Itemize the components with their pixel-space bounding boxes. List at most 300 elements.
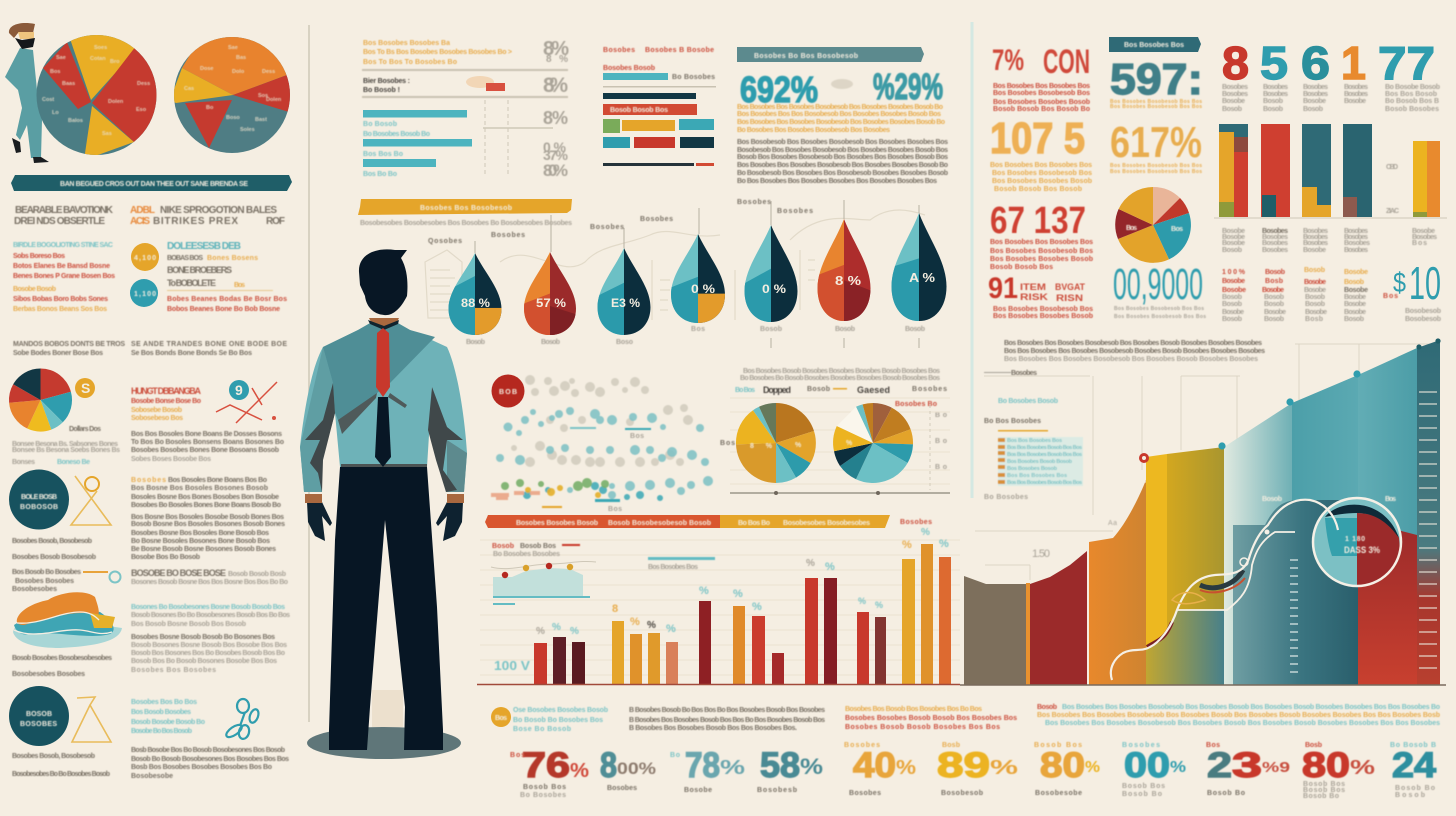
hands <box>307 502 463 541</box>
text block: percentage labels: Bo Bosobes <box>520 792 566 799</box>
bar chart: teal horizontal bars: Bo Bosobes Bosob Bo <box>363 131 430 138</box>
text block: percentage labels: Bosobes <box>849 790 881 797</box>
bar chart: teal horizontal bars: Bos Bos Bo <box>363 151 403 158</box>
text block: digit captions: Bosob <box>1263 106 1283 113</box>
big percentages: 3 <box>1232 746 1262 785</box>
text block: percentage labels: Bosob Bos <box>1303 781 1345 788</box>
text block: percentage labels: Bos <box>510 752 525 759</box>
pie chart: right: Dolo <box>232 69 245 75</box>
panel: teardrop charts <box>358 199 946 348</box>
big numbers: column two: Bos Bosobes Bosobesob Bos Bos <box>1110 99 1202 105</box>
text block: column captions: Bosobe <box>1262 287 1284 294</box>
big numbers and copy: column one: 91 <box>988 272 1018 305</box>
mini area chart: Bo Bosobes Bosobes <box>493 551 560 558</box>
icon: yellow badge: 4,100 <box>134 255 156 262</box>
bar chart: teal horizontal bars: 0% <box>543 139 567 155</box>
text block: column captions: Bosobe <box>1222 287 1246 294</box>
big percentages: %9 <box>1262 759 1290 776</box>
panel: twin pie charts <box>720 368 950 495</box>
text block: chart intro and legend: Bos Bosobes Bos Bosobes Bosobesob Bos Bosobes Bosob Bosobes Bosobes Bosobes <box>1004 340 1262 347</box>
text block: bottom copy <box>513 704 1440 733</box>
teardrop labels <box>428 199 925 346</box>
pie chart: right: Sae <box>228 45 238 51</box>
text block: column captions: Bos <box>1383 293 1398 300</box>
column value labels: % <box>552 622 561 633</box>
column value labels: % <box>699 585 709 597</box>
bar chart: stacked columns: ZIAC <box>1386 208 1399 215</box>
text block: captions two: Bosobes Bosob, Bosobesob <box>12 753 95 760</box>
text block: copy: Bo Bosobesob Bos Bosobes Bos Bosobesob Bosobes Bosobes Bosob <box>737 170 948 177</box>
shadow <box>307 727 461 759</box>
column value labels: % <box>921 527 930 538</box>
text block: column captions: Bosob <box>1222 294 1242 301</box>
icon: teal number badge with arrow: 9 <box>235 382 243 398</box>
text block: percentage labels: Bosob Bo <box>1395 785 1435 792</box>
teardrop labels: Bosobes <box>640 216 673 223</box>
column value labels: % <box>902 539 912 551</box>
text block: digit captions: Bo Bosob Bos B <box>1385 98 1439 105</box>
text block: long copy: Bosob Bosne Bos Bosoles Bosones Bosob Bones <box>131 521 285 528</box>
banner: section heading: BAN BEGUED CROS OUT DAN THEE OUT SANE BRENDA SE <box>60 181 248 188</box>
text block: bottom copy: Bos Bosobes Bos Bosobes Bosobesob Bos Bosobes Bosob Bos Bosobes Bosob Bosobes Bosobes Bos Bos Bosobes Bo <box>1062 704 1440 711</box>
text block: captions one <box>12 538 96 593</box>
text block: intro columns: ROF <box>266 216 285 227</box>
big percentages: % <box>990 757 1018 779</box>
text block: digit captions: Bosobes <box>1303 84 1328 91</box>
pie chart: left: Cotan <box>90 56 106 62</box>
text block: captions one: Bosobesobes <box>12 586 57 593</box>
text block: copy: Bos Bosobes Bos Bosobes Bosobesob Bos Bosobes Bosobes Bosob Bo <box>737 162 948 169</box>
shirt <box>300 322 467 492</box>
text block: column captions: Bosobe <box>1344 294 1366 301</box>
text block: percentage labels: Bosobes <box>844 742 880 749</box>
icon: yellow triangle two <box>72 697 111 742</box>
text block: column captions: Bosobe <box>1222 228 1245 235</box>
text block: captions one: Bosobes Bosob, Bosobesob <box>12 538 92 545</box>
text block: digit captions: Bosobe <box>1344 98 1366 105</box>
text block: pie header: Bo Bos <box>735 387 755 394</box>
banner: orange heading: Bosob Bosobesobesob Bosob <box>608 520 711 527</box>
text block: column captions: Bosobe <box>1305 309 1327 316</box>
banner: orange heading: Bosobesobes Bosobesobes <box>783 520 870 527</box>
text block: digit captions: Bosobes <box>1263 91 1288 98</box>
text block: intro columns: SE ANDE TRANDES BONE ONE BODE BOE <box>131 341 287 348</box>
text block: long copy: Bosob Bosobe Bosob Bo <box>131 719 205 726</box>
panel: right column statistics <box>988 37 1447 323</box>
teardrop 5 <box>744 225 798 322</box>
teardrop labels: Bosobes <box>590 224 624 231</box>
column value labels: % <box>647 620 656 631</box>
text block: long copy: Sobosebeso Bos <box>131 415 183 422</box>
text block: intro columns: Se Bos Bonds Bone Bonds Se Bo Bos <box>131 350 252 357</box>
pie chart: left: Balos <box>68 118 83 124</box>
text block: column captions: Bosob <box>1222 316 1242 323</box>
text block: intro columns: DREI NDS OBSERTLE <box>14 216 105 227</box>
big percentages: % <box>1170 759 1186 776</box>
pie chart: left: Eso <box>136 107 147 113</box>
text block: pie header: Bo Bosobes Bo Bosob Bosobes Bosobes Bosobes Bosob Bosobes Bos <box>740 375 940 382</box>
banner: orange heading: Bosobes Bosobes Bosob <box>516 520 598 527</box>
text block: long copy: Bosb Bosobe Bos Bo Bosob Bosobesones Bos Bosob <box>131 747 285 754</box>
text block: column captions: Bosobes <box>1344 228 1368 235</box>
big percentages: % <box>800 754 823 779</box>
text block: percentage labels: Bosobesob <box>941 790 983 797</box>
text block: yellow header: Bos To Bos To Bosobes Bo <box>363 59 457 66</box>
banner: yellow heading <box>358 199 572 215</box>
big numbers and copy: column one: Bos Bosobes Bosobesob Bos <box>993 306 1093 313</box>
column value labels: % <box>875 600 883 610</box>
banner: orange heading: Bo Bos Bo <box>738 520 770 527</box>
pie chart: middle right <box>833 403 913 483</box>
panel: grouped column chart <box>477 515 960 684</box>
text block: chart intro and legend: Bos Bos Bosobes Bos <box>1007 438 1062 444</box>
text block: long copy: Bosobe Bos Bo Bosob <box>131 554 200 561</box>
text block: captions one: Bosobes Bosobes <box>15 578 74 585</box>
text block: digit captions: Bosobes <box>1222 84 1248 91</box>
text block: column captions: Bosobe <box>1344 301 1366 308</box>
text block: bottom copy: Ose Bosobes Bosobes Bosob <box>513 707 608 714</box>
panel: top right copy <box>737 47 948 185</box>
text block: long copy: Be Bosne Bosob Bosne Bosones Bosob Bones <box>131 546 276 553</box>
pie chart: right: Boso <box>226 115 240 121</box>
mini area chart: Bos Bosobes Bos <box>648 564 698 571</box>
big numbers and copy: column one: Bos Bosobes Bosobes Bosob <box>993 313 1093 320</box>
text block: long copy: Bosob Bosones Bosne Bosob Bos Bosobe Bos Bos <box>131 642 287 649</box>
text block: column captions: Bosob <box>1222 247 1242 254</box>
big numbers and copy: column one: RISN <box>1056 293 1083 303</box>
text block: digit captions: Bosob <box>1303 106 1323 113</box>
text block: badge copy: DOLEESESB DEB <box>167 241 241 252</box>
text block: badge copy: Bones Bosens <box>207 255 258 262</box>
text block: column captions: Bosobe <box>1344 287 1368 294</box>
text block: long copy: Bosobe Bo Bos Bosob <box>131 728 192 735</box>
text block: pie header: Bo <box>935 438 947 445</box>
panel: dot cluster map <box>491 374 713 513</box>
text block: chart intro and legend: Bo Bosobes <box>984 494 1028 501</box>
big numbers: column two: Bos Bosobes Bosobesob Bos Bos <box>1110 104 1202 110</box>
big percentages: 89 <box>937 746 990 785</box>
column value labels: % <box>858 596 866 606</box>
icon: red badge <box>492 374 524 408</box>
icon: dark circle badge one <box>9 470 69 530</box>
panel: bottom statistics row <box>491 704 1440 800</box>
big number: dollar value: $ <box>1393 267 1406 298</box>
big percentages: 00% <box>617 759 656 778</box>
icon: red badge: BOB <box>499 389 517 396</box>
column value labels: 8 <box>612 603 618 615</box>
text block: percentage labels: Bosobes <box>1122 742 1160 749</box>
text block: chart intro and legend: Bos Bosobes Bosob Bosob <box>1007 459 1073 465</box>
text block: percentage labels: Bosob Bos <box>1122 783 1165 790</box>
bar chart: teal horizontal bars: 37% <box>543 147 569 163</box>
text block: column captions: Bosb <box>1305 316 1323 323</box>
text block: copy <box>737 104 948 185</box>
text block: digit captions: Bo Bosobe Bosob <box>1385 84 1440 91</box>
text block: column captions: Bosob <box>1305 301 1325 308</box>
banner: teal tag: Bos Bosobes Bos <box>1124 42 1184 49</box>
text block: column captions: Bos <box>1412 240 1427 247</box>
text block: column captions: Bosob <box>1344 279 1364 286</box>
text block: wave captions: Bosobesobes Bosobes <box>12 671 85 678</box>
text block: column captions: Bosobe <box>1344 269 1368 276</box>
column value labels: % <box>733 588 743 600</box>
big numbers and copy: column one: Bosob Bosob Bos <box>990 264 1053 271</box>
text block: pie header: Gaesed <box>857 385 890 395</box>
teardrop labels: Qosobes <box>428 238 462 245</box>
text block: column captions: Bosobe <box>1304 287 1326 294</box>
teardrop labels: Boso <box>616 339 633 346</box>
text block: chart intro and legend: Bos Bos Bosobes Bosob Bos Bos <box>1007 480 1082 486</box>
teardrop 7 <box>892 213 946 321</box>
text block: column captions: Bosobes <box>1262 247 1288 254</box>
text block: percentage labels: Bosobesobe <box>1035 790 1082 797</box>
big numbers: column two: Bos Bosobes Bosobesob Bos Bos <box>1114 314 1206 320</box>
bar chart: teal horizontal bars: Bo Bosob <box>363 121 397 128</box>
big numbers: column two: Bos Bosobes Bosobesob Bos Bos <box>1110 163 1202 169</box>
text block: percentage labels: Bosobe <box>684 787 712 794</box>
text block: chart intro and legend: Bos Bos Bosobes Bosob Bos Bos <box>1007 445 1082 451</box>
text block: column captions: Bosobes <box>1344 234 1368 241</box>
text block: percentage labels: Bosob Bos <box>1303 787 1345 794</box>
text block: bottom copy: Bosobes Bosobes Bosob Bosob Bos Bosobes Bos <box>845 715 1017 722</box>
text block: badge copy: Bobos Beanes Bone Bo Bob Bosne <box>167 306 280 313</box>
teardrop 2 <box>524 252 576 335</box>
chart small labels: Bosob <box>1262 496 1282 503</box>
text block: copy: Bosobesob Bos Bosobes Bosobesob Bos Bosobes Bosobes Bosob Bos <box>737 147 948 154</box>
text block: intro columns: Sobs Boreso Bos <box>13 253 65 260</box>
pie chart: left: Sas <box>102 131 112 137</box>
text block: column captions: Bosob <box>1305 294 1325 301</box>
text block: long copy: Bosobes Bosne Bos Bosoles Bone Bosob Bos <box>131 530 269 537</box>
big numbers: teal percentages: %29% <box>873 66 943 107</box>
text block: bottom copy: B Bosobes Bosob Bo Bos Bos Bo Bos Bosobes Bosob Bos Bosobes <box>629 707 825 714</box>
banner: slate heading: Bosobes Bo Bos Bosobesob <box>754 53 858 60</box>
pie chart: left: Baas <box>62 81 75 87</box>
text block: column captions: Bosobes <box>1262 228 1288 235</box>
dot clusters: Bos <box>630 433 644 440</box>
panel: middle stacked bars: Bo Bosobes <box>672 74 715 81</box>
pie chart: right: Dose <box>200 66 213 72</box>
pie chart: right: Bo <box>206 105 214 111</box>
text block: copy: Bosob Bos Bosobes Bosobesob Bos Bosobes Bos Bosobes Bosob Bos <box>737 154 948 161</box>
big percentages <box>522 746 1437 785</box>
text block: column captions: Bosob <box>1304 267 1325 274</box>
text block: chart intro and legend: Bo Bosobes Bosob <box>998 398 1058 405</box>
text block: column captions <box>1222 228 1441 323</box>
text block: percentage labels: Bosob Bo <box>1303 793 1339 800</box>
text block: yellow header: 8% <box>546 54 568 65</box>
icon: yellow coin <box>75 378 95 398</box>
text block: percentage labels: Bosobesb <box>757 787 797 794</box>
text block: percentage labels: Bosob Bo <box>1122 791 1162 798</box>
text block: badge copy: BOBAS BOS <box>167 255 203 262</box>
bar chart: teal horizontal bars: 8% <box>543 108 568 128</box>
text block: column captions: Bosobe <box>1222 278 1245 285</box>
big numbers: column two: 597: <box>1110 55 1203 104</box>
big digits: top right <box>1222 37 1435 89</box>
big digits: top right: 5 <box>1260 37 1288 89</box>
panel: middle stacked bars <box>603 47 716 166</box>
big percentages: 76 <box>522 746 570 785</box>
text block: long copy: To Bos Bo Bosoles Bonsens Boans Bosones Bo <box>131 439 284 446</box>
text block: digit captions <box>1222 84 1440 113</box>
text block: long copy: Bos Bosob Bosne Bosob Bos Bosob <box>131 621 246 628</box>
text block: long copy: Boneso Be <box>57 459 90 466</box>
stems <box>475 200 919 348</box>
big numbers and copy: column one: Bos Bosobes Bosobesob Bos <box>990 248 1093 255</box>
text block: digit captions: Bosobe <box>1222 98 1245 105</box>
big digits: top right: 77 <box>1378 37 1435 89</box>
big numbers and copy: column one: Bos Bosobes Bos Bosobes Bos <box>990 239 1093 246</box>
text block: intro columns: Benes Bones P Grane Bosen Bos <box>13 273 115 280</box>
text block: wave captions: Bosob Bosobes Bosobesobesobes <box>12 655 112 662</box>
pie chart: left: Dess <box>137 81 150 87</box>
text block: badge copy: To BOBOLETE <box>167 278 216 288</box>
pie chart: left: Bro <box>110 59 120 65</box>
text block: pie header <box>720 368 947 471</box>
big numbers and copy: column one: Bos Bosobes Bosobesob Bos <box>993 90 1090 97</box>
big percentages: 58 <box>760 746 800 785</box>
text block: column captions: Bosobes <box>1412 234 1437 241</box>
text block: badge copy: Bos <box>234 282 245 289</box>
pie chart: right <box>174 37 290 153</box>
text block: long copy: Bosob Bosob Bosb <box>228 571 286 578</box>
pie chart: column two <box>1115 187 1191 263</box>
big numbers and copy: column one: Bos Bosobes Bosobes Bosob <box>993 99 1090 106</box>
text block: column captions: Bosb <box>1265 278 1283 285</box>
chart small labels <box>1262 496 1396 503</box>
text block: long copy: Bosob Bos Bosones Bos Bo Bosobes Bosob Bos Bo <box>131 650 285 657</box>
pie chart: right: Dolen <box>266 97 282 103</box>
big numbers: column two: Bos Bosobes Bosobesob Bos Bos <box>1114 306 1204 312</box>
text block: pie header: Bo <box>935 464 947 471</box>
pie chart: right: Sos <box>258 93 268 99</box>
icon: teal badge: 1,100 <box>134 291 156 298</box>
text block: long copy: Sobes Boses Bosobe Bos <box>131 456 211 463</box>
big numbers and copy: column one: Bos Bosobes Bos Bosobes Bos <box>990 162 1092 169</box>
text block: copy: Bos Bosobes Bos Bos Bosobesob Bos Bosobes Bosobes Bosob Bos <box>737 111 941 118</box>
banner: yellow heading: Bosobes Bos Bosobesob <box>420 205 512 212</box>
text block: long copy: Bosobes Bos Bo Bos <box>131 699 197 706</box>
background sketches <box>425 210 925 320</box>
teardrop 2: 57 % <box>536 296 566 310</box>
text block: intro columns: BEARABLE BAVOTIONK <box>15 205 114 216</box>
pie chart: column two: Bos <box>1171 226 1183 233</box>
text block: long copy: Bosob Bosones Bo Bo Bosobesones Bosob Bos Bo Bos <box>131 612 290 619</box>
icon: yellow badge <box>131 243 159 271</box>
text block: long copy: Bosoles Bosne Bos Bones Bosobes Bon Bosobe <box>131 494 279 501</box>
text block: chart intro and legend: Bosobes <box>1011 370 1037 377</box>
pie chart: middle left: % <box>795 442 802 449</box>
big numbers: teal percentages: 692% <box>740 69 818 110</box>
bar chart: teal horizontal bars: 80% <box>543 161 568 180</box>
text block: long copy: BOSOBE BO BOSE BOSE <box>131 568 226 578</box>
text block: intro columns: ADBL <box>130 205 155 216</box>
bar chart: stacked columns <box>1214 124 1447 218</box>
big percentages: 40 <box>853 746 896 785</box>
big numbers and copy: column one <box>988 43 1093 320</box>
text block: column captions: Bosobe <box>1412 228 1435 235</box>
pie chart: middle left <box>736 403 816 483</box>
text block: chart intro and legend: Bos Bosobes Bos Bosobes Bosobesob Bos Bosobes Bosob Bosobes Bosobes <box>1004 356 1258 363</box>
icon: small teal ring <box>83 572 120 582</box>
text block: long copy: Bosones Bo Bosobesones Bosne Bosob Bosob Bos <box>131 604 285 611</box>
text block: column captions: Bosobes <box>1262 234 1288 241</box>
banner: orange heading <box>485 515 932 528</box>
teardrop 7: A % <box>909 270 935 285</box>
text block: percentage labels: Bosb <box>1305 742 1322 749</box>
callout: circular pie magnifier: DASS 3% <box>1344 545 1380 555</box>
text block: badge copy: BONE BROEBERS <box>167 265 232 275</box>
text block: percentage labels: Bosob Bos <box>1034 742 1082 749</box>
text block: pie header: Dopped <box>763 385 791 395</box>
text block: column captions: Bosobe <box>1303 247 1326 254</box>
teardrop 3 <box>598 248 650 335</box>
text block: long copy: Bos Bosob Bosobes <box>131 709 191 716</box>
text block: column captions: Bosobe <box>1222 240 1245 247</box>
banner: slate heading <box>737 47 924 62</box>
text block: long copy: Sobosebe Bosob <box>131 407 182 414</box>
big numbers and copy: column one: 7% <box>992 44 1024 77</box>
text block: intro columns: MANDOS BOBOS DONTS BE TROS <box>13 341 125 348</box>
text block: long copy: Bonses <box>12 459 35 466</box>
text block: column captions: Bosobes <box>1344 240 1370 247</box>
teardrop labels: Bosob <box>541 339 560 346</box>
columns <box>534 544 951 684</box>
big numbers and copy: column one: BVGAT <box>1055 282 1085 292</box>
text block: long copy: Bos Bos Bosoles Bone Boans Be Dosses Bosons <box>131 431 282 438</box>
icon: teal number badge with arrow <box>216 380 277 423</box>
column value labels: % <box>939 538 949 550</box>
teardrop labels: Bosobes <box>491 232 525 239</box>
text block: column captions: Bosobes <box>1303 234 1328 241</box>
text block: column captions: Bosobes <box>1344 247 1368 254</box>
big numbers: teal percentages <box>740 66 943 110</box>
big percentages: % <box>570 760 589 782</box>
text block: intro columns: Bosobe Bosob <box>13 286 56 293</box>
text block: chart intro and legend: Bos Bos Bosobes Bos Bosobes Bosobesob Bosobes Bosob Bosobes Bosobes Bosobes <box>1004 348 1265 355</box>
big percentages: 8 <box>600 746 617 785</box>
text block: copy: Bos Bosobes Bos Bosobes Bosobesob Bos Bosobes Bosobes Bosob Bo <box>737 119 945 126</box>
text block: column captions: Bosob <box>1264 301 1284 308</box>
text block: long copy: Bosb Bos Bosobes Bosobes Bosobes Bos Bo <box>131 764 272 771</box>
callout: circular pie magnifier <box>1312 497 1404 590</box>
text block: yellow header: 8% <box>543 74 568 97</box>
text block: digit captions: Bosobes <box>1344 84 1368 91</box>
panel: left column <box>5 23 295 780</box>
text block: digit captions: Bosobes <box>1222 91 1248 98</box>
banner: orange heading: Bosobes <box>900 519 932 526</box>
text block: yellow header <box>362 38 569 98</box>
text block: long copy: Bosobes <box>131 477 166 484</box>
text block: digit captions: Bos Bos Bosob <box>1385 91 1437 98</box>
teardrop 3: E3 % <box>611 296 640 310</box>
pie chart: left: Sae <box>56 55 66 61</box>
pie chart: left: Dolen <box>108 99 124 105</box>
text block: percentage labels <box>510 742 1436 800</box>
pie chart: left <box>36 35 156 155</box>
pie chart: left: Soes <box>94 45 107 51</box>
column value labels: % <box>806 558 815 569</box>
text block: pie header: Bos Bosobes Bosob Bosobes Bosobes Bosobes Bosob Bosobes Bos <box>743 368 940 375</box>
panel: top bars <box>362 38 569 180</box>
text block: yellow header: Bos To Bs Bos Bosobes Bosobes Bosobes Bo > <box>363 49 512 56</box>
text block: digit captions: Bosob <box>1222 106 1242 113</box>
text block: chart intro and legend: Bo Bos Bosobes <box>984 418 1041 425</box>
chart small labels: Bos <box>1385 496 1396 503</box>
big digits: top right: 8 <box>1222 37 1249 89</box>
teardrop 4 <box>671 234 725 323</box>
